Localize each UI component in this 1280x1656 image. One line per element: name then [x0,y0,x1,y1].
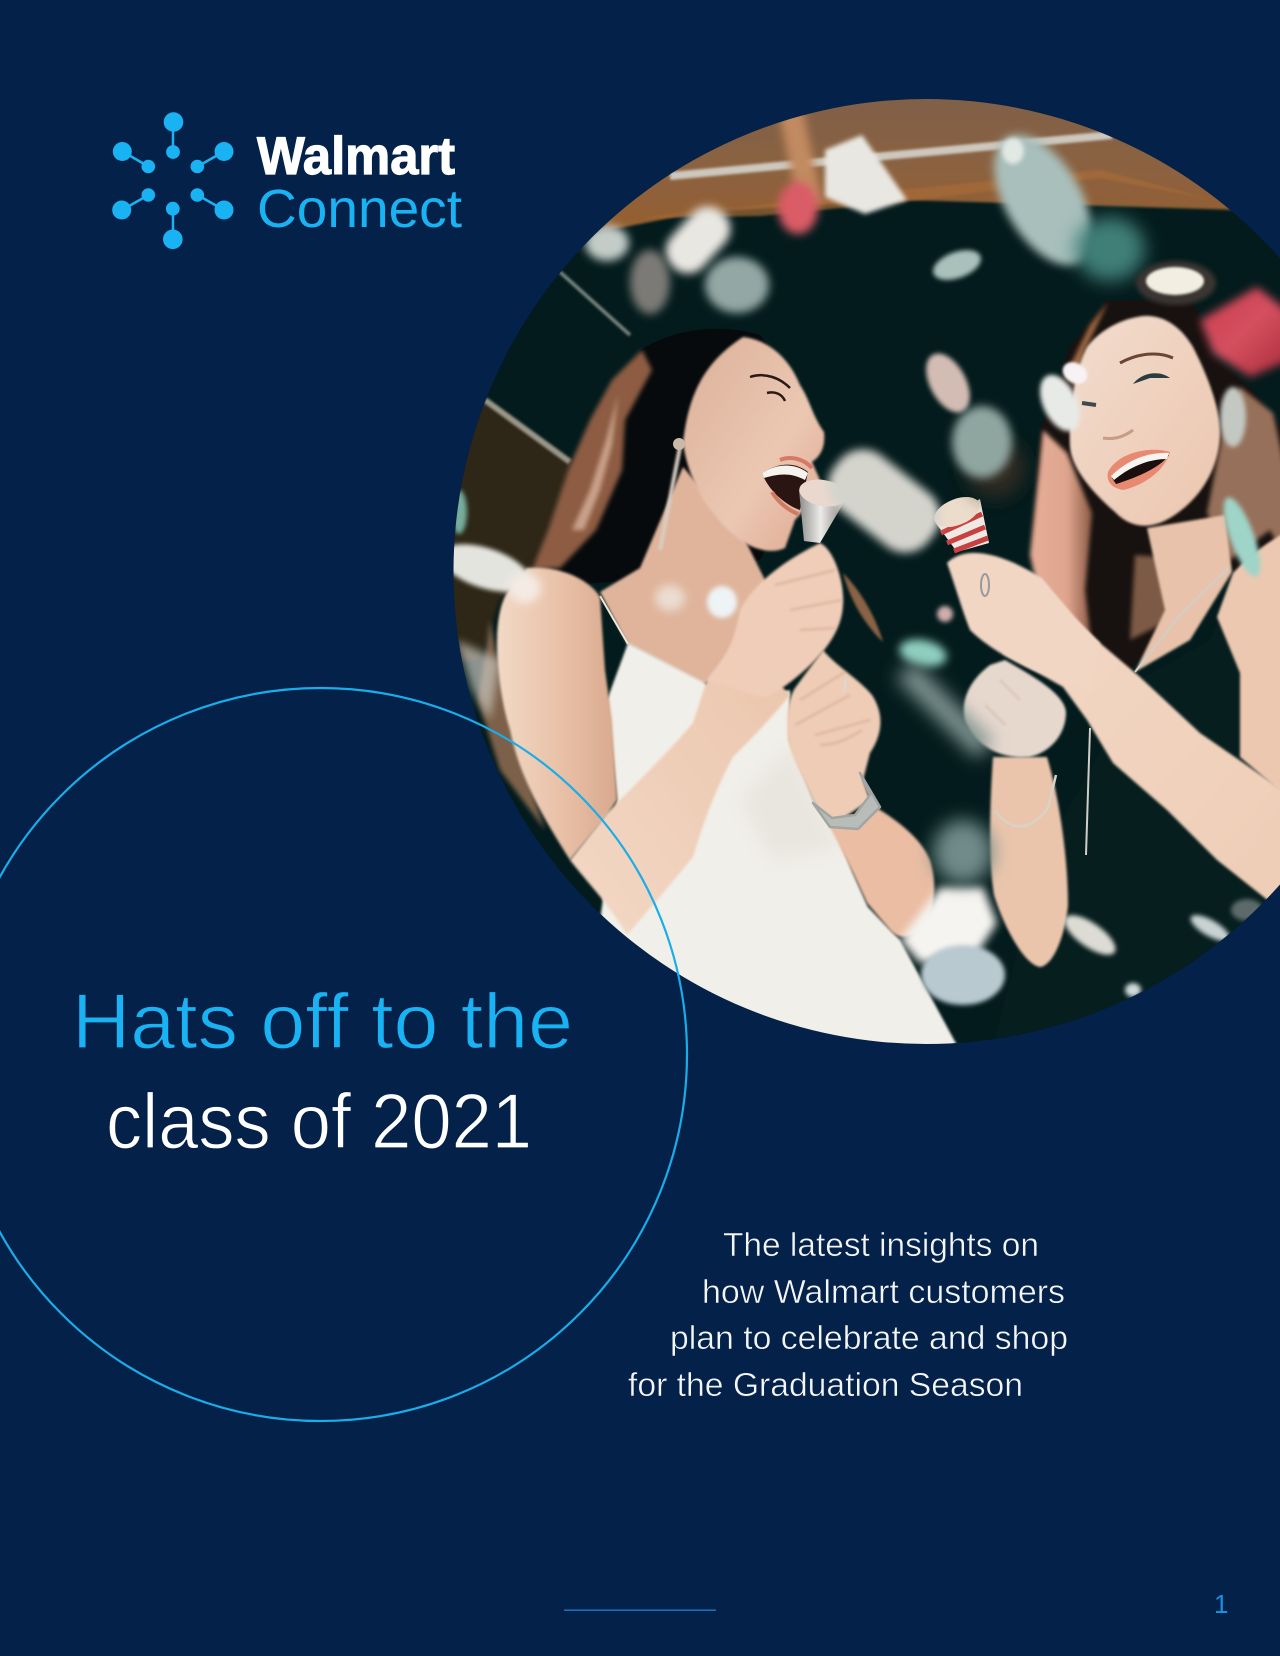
hair wisp near shoulder [478,620,545,830]
photo backdrop [440,90,1280,1060]
black top [996,921,1244,1039]
lower fist [964,660,1066,757]
watch [813,773,880,829]
brown hair at right [1207,387,1280,570]
hair lock at temple [1068,302,1108,390]
white dress [600,643,965,1060]
head and face [683,337,824,551]
forearm [570,640,790,935]
confetti pieces [435,104,1280,1005]
right shoulder and upper arm [1217,530,1280,800]
title line 1: Hats off to the [72,977,573,1065]
subtitle text block [628,1226,1068,1403]
subtitle line 1: The latest insights on [723,1226,1039,1263]
subtitle line 4: for the Graduation Season [628,1366,1023,1403]
logo: Walmart Connect [112,112,462,249]
footer rule [564,1610,716,1611]
upper hand [707,543,843,697]
brown hair strand [532,350,652,570]
black hair [540,329,825,585]
upper arm [497,568,617,860]
right lower arm [830,808,934,937]
subtitle line 2: how Walmart customers [702,1273,1065,1310]
lower arm [990,757,1068,967]
logo wordmark: Walmart: Walmart [257,127,455,186]
logo icon: connected nodes [112,112,234,249]
title [72,977,573,1165]
dress strap [600,596,628,644]
head and face [1070,316,1220,526]
neck and chest [600,467,770,685]
right woman [930,300,1280,1060]
logo wordmark: Connect: Connect [257,179,462,239]
pink hair strand [1030,430,1092,650]
open mouth [762,465,808,510]
left wall [445,395,572,660]
outline circle [0,688,687,1421]
upper hand [947,553,1100,690]
dark hair [1030,300,1280,670]
bracelet [995,775,1056,826]
mouth [1108,450,1170,490]
subtitle line 3: plan to celebrate and shop [670,1319,1068,1356]
ceiling wood beam [600,99,1232,231]
wire lines [560,272,630,335]
eyebrow and eyes [1120,354,1173,363]
ring [981,574,989,596]
hair wisp behind hand [843,573,883,642]
title line 2: class of 2021 [106,1077,532,1165]
page number: 1 [1214,1589,1228,1619]
nose shadow [1103,430,1133,439]
neck [1135,515,1232,672]
photo: two women with confetti poppers in a circle [435,80,1280,1060]
forearm [1003,577,1280,902]
lower hand [787,650,880,827]
ring [844,678,846,692]
striped popper cone [930,491,989,552]
silver popper cone [799,480,843,543]
lower center white surface [900,887,997,963]
eyebrow and eye [750,375,790,401]
necklace [1086,568,1228,855]
earring [660,447,680,550]
left woman [497,329,965,1060]
